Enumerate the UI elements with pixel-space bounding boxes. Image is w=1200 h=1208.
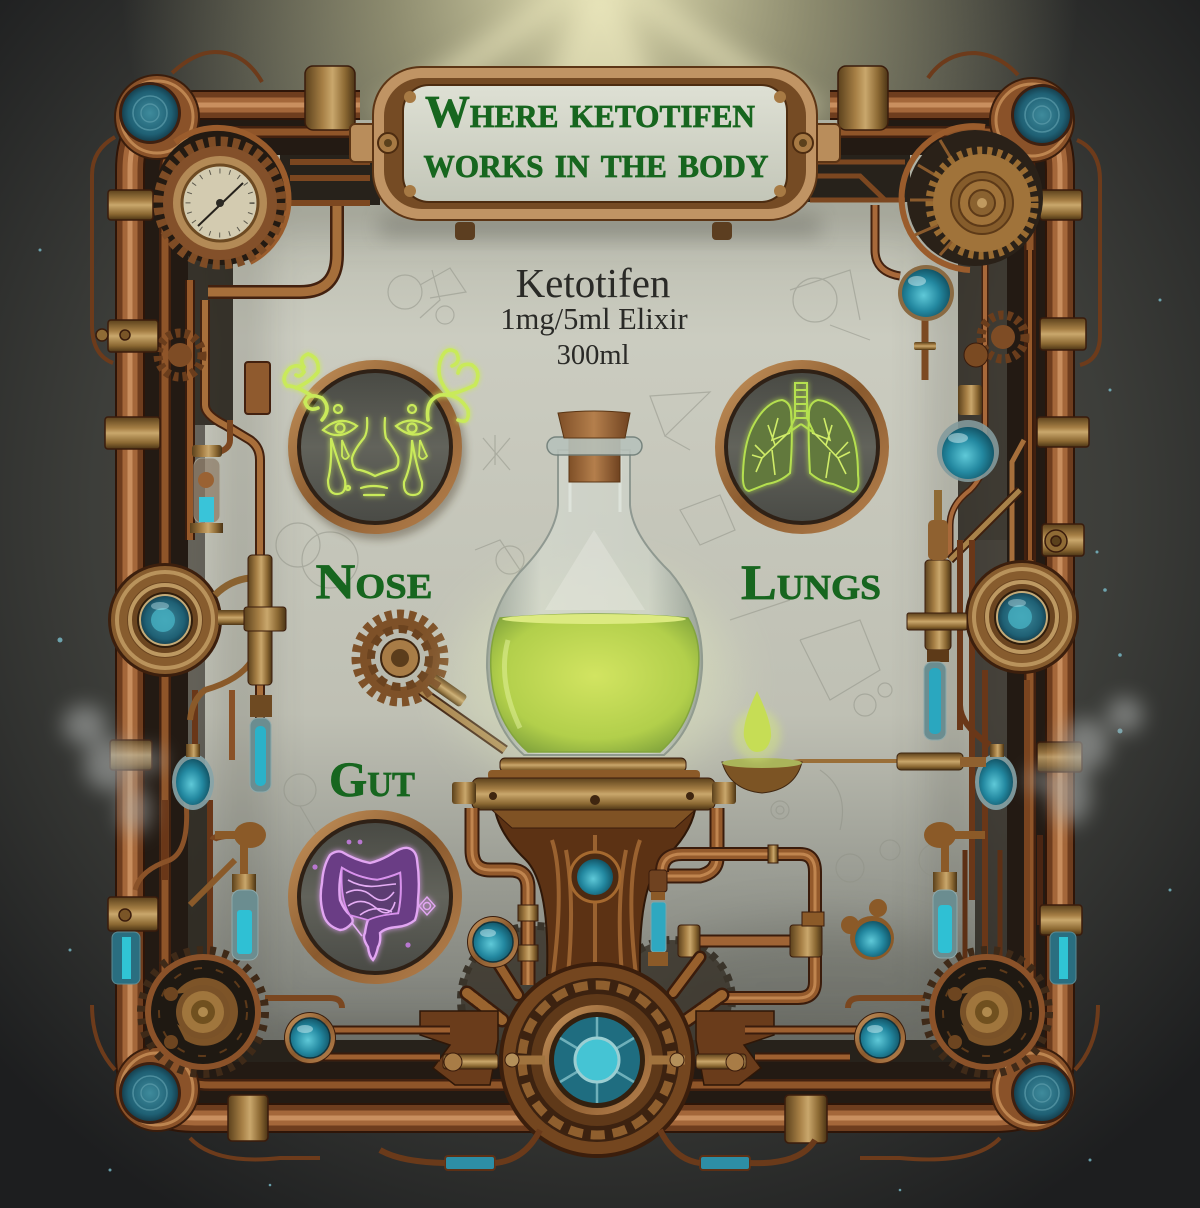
flask xyxy=(454,411,734,790)
title text: Where ketotifen xyxy=(425,86,755,137)
porthole: gut xyxy=(288,810,462,984)
big right gauge xyxy=(907,490,1079,740)
pedestal under flask xyxy=(452,758,736,975)
dosing spoon with droplet xyxy=(722,691,986,793)
arms feeding the hub xyxy=(467,957,722,1020)
lower horizontal pipes xyxy=(265,998,925,1057)
frame: outer copper pipes xyxy=(130,105,1060,1118)
rods and rivets beside hub xyxy=(443,1053,746,1071)
cork stopper xyxy=(547,411,642,482)
right side secondary pipes xyxy=(810,162,1040,1060)
big left gauge xyxy=(108,555,286,792)
product details text: Ketotifen xyxy=(516,260,670,306)
porthole: nose xyxy=(284,350,478,540)
light glow from above xyxy=(100,0,1100,460)
small orb: centre left xyxy=(467,916,519,968)
faint science sketches xyxy=(276,268,951,882)
porthole: lungs xyxy=(715,360,889,534)
lower right vials xyxy=(924,822,1076,984)
corner gauge orbs xyxy=(114,74,1076,1132)
icon: watery eyes and nose xyxy=(284,350,478,495)
steam right xyxy=(1026,697,1143,825)
icon: intestines xyxy=(321,848,435,960)
thin arcing cables outside frame xyxy=(92,52,1100,1159)
paper panel xyxy=(150,120,1050,1110)
label: nose: Nose xyxy=(316,553,432,609)
side orbs xyxy=(172,744,1017,810)
organ labels xyxy=(316,553,881,807)
plumbing under pedestal xyxy=(472,808,815,998)
lower left vials xyxy=(112,822,266,984)
icon: lungs xyxy=(743,383,858,492)
pressure gauge with gear xyxy=(154,128,290,265)
title plaque: works in the body xyxy=(424,136,768,187)
pipe clamps xyxy=(96,66,1089,1143)
product details text: 1mg/5ml Elixir xyxy=(500,302,688,336)
gear and lever by flask xyxy=(356,614,505,750)
bottom blue capsules xyxy=(380,1130,815,1170)
label: gut: Gut xyxy=(329,751,415,807)
small blue vial under pipe xyxy=(648,892,668,966)
lower corner gears xyxy=(141,950,1049,1074)
label: lungs: Lungs xyxy=(741,554,881,610)
title plaque xyxy=(350,67,840,240)
left vial xyxy=(190,445,223,533)
small orb cluster: lower right xyxy=(841,899,894,960)
dark machinery backdrop behind side pipes xyxy=(185,130,1038,1110)
right brass gear xyxy=(902,126,1043,270)
small side gears and boxes xyxy=(158,315,1025,414)
background gears behind hub xyxy=(461,926,732,1074)
steam left xyxy=(63,705,164,834)
small orbs and flasks on right xyxy=(898,265,999,482)
lower blue orbs xyxy=(284,1012,906,1064)
left side secondary pipes xyxy=(135,162,370,1000)
product details text xyxy=(500,260,688,371)
background sparks xyxy=(38,248,1172,1191)
product details text: 300ml xyxy=(557,340,629,371)
central hub with blue porthole xyxy=(499,962,695,1158)
pipe brackets beside hub xyxy=(420,1011,774,1085)
pipe fittings xyxy=(518,845,824,961)
